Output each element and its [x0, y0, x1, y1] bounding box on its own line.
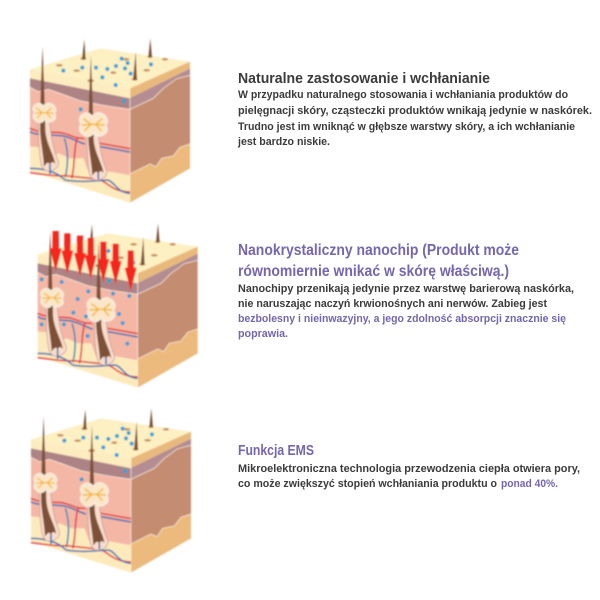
text block: nanochip	[238, 242, 574, 340]
text block: EMS	[238, 443, 580, 490]
text block: natural absorption: Naturalne zastosowanie i wchłanianie	[238, 71, 490, 87]
panel: EMS function	[31, 408, 580, 573]
illustration: skin cross-section with surface particles, EMS	[31, 408, 191, 573]
text block: nanochip: poprawia.	[238, 328, 288, 340]
text block: natural absorption: W przypadku naturalnego stosowania i wchłaniania produktów do	[238, 89, 568, 101]
text block: natural absorption: jest bardzo niskie.	[237, 136, 330, 148]
text block: natural absorption: pielęgnacji skóry, cząsteczki produktów wnikają jedynie w naskórek.	[238, 105, 592, 117]
text block: natural absorption: Trudno jest im wniknąć w głębsze warstwy skóry, a ich wchłanianie	[238, 121, 575, 133]
text block: nanochip: równomiernie wnikać w skórę właściwą.)	[238, 263, 509, 280]
text block: EMS: Funkcja EMS	[238, 443, 314, 459]
text block: EMS: ponad 40%.	[501, 478, 558, 490]
panel: natural absorption	[30, 38, 592, 203]
text block: nanochip: nie naruszając naczyń krwionośnych ani nerwów. Zabieg jest	[238, 298, 547, 310]
panel: nanocrystalline nanochip	[38, 223, 574, 388]
text block: nanochip: Nanokrystaliczny nanochip (Produkt może	[238, 242, 519, 259]
text block: natural absorption	[237, 71, 592, 148]
illustration: skin cross-section with nanochip arrows	[38, 223, 198, 388]
text block: nanochip: Nanochipy przenikają jedynie przez warstwę barierową naskórka,	[238, 283, 574, 295]
text block: nanochip: bezbolesny i nieinwazyjny, a jego zdolność absorpcji znacznie się	[238, 313, 566, 325]
text block: EMS: co może zwiększyć stopień wchłaniania produktu o	[238, 478, 497, 490]
text block: EMS: Mikroelektroniczna technologia przewodzenia ciepła otwiera pory,	[238, 463, 580, 475]
illustration: skin cross-section with surface particles	[30, 38, 190, 203]
